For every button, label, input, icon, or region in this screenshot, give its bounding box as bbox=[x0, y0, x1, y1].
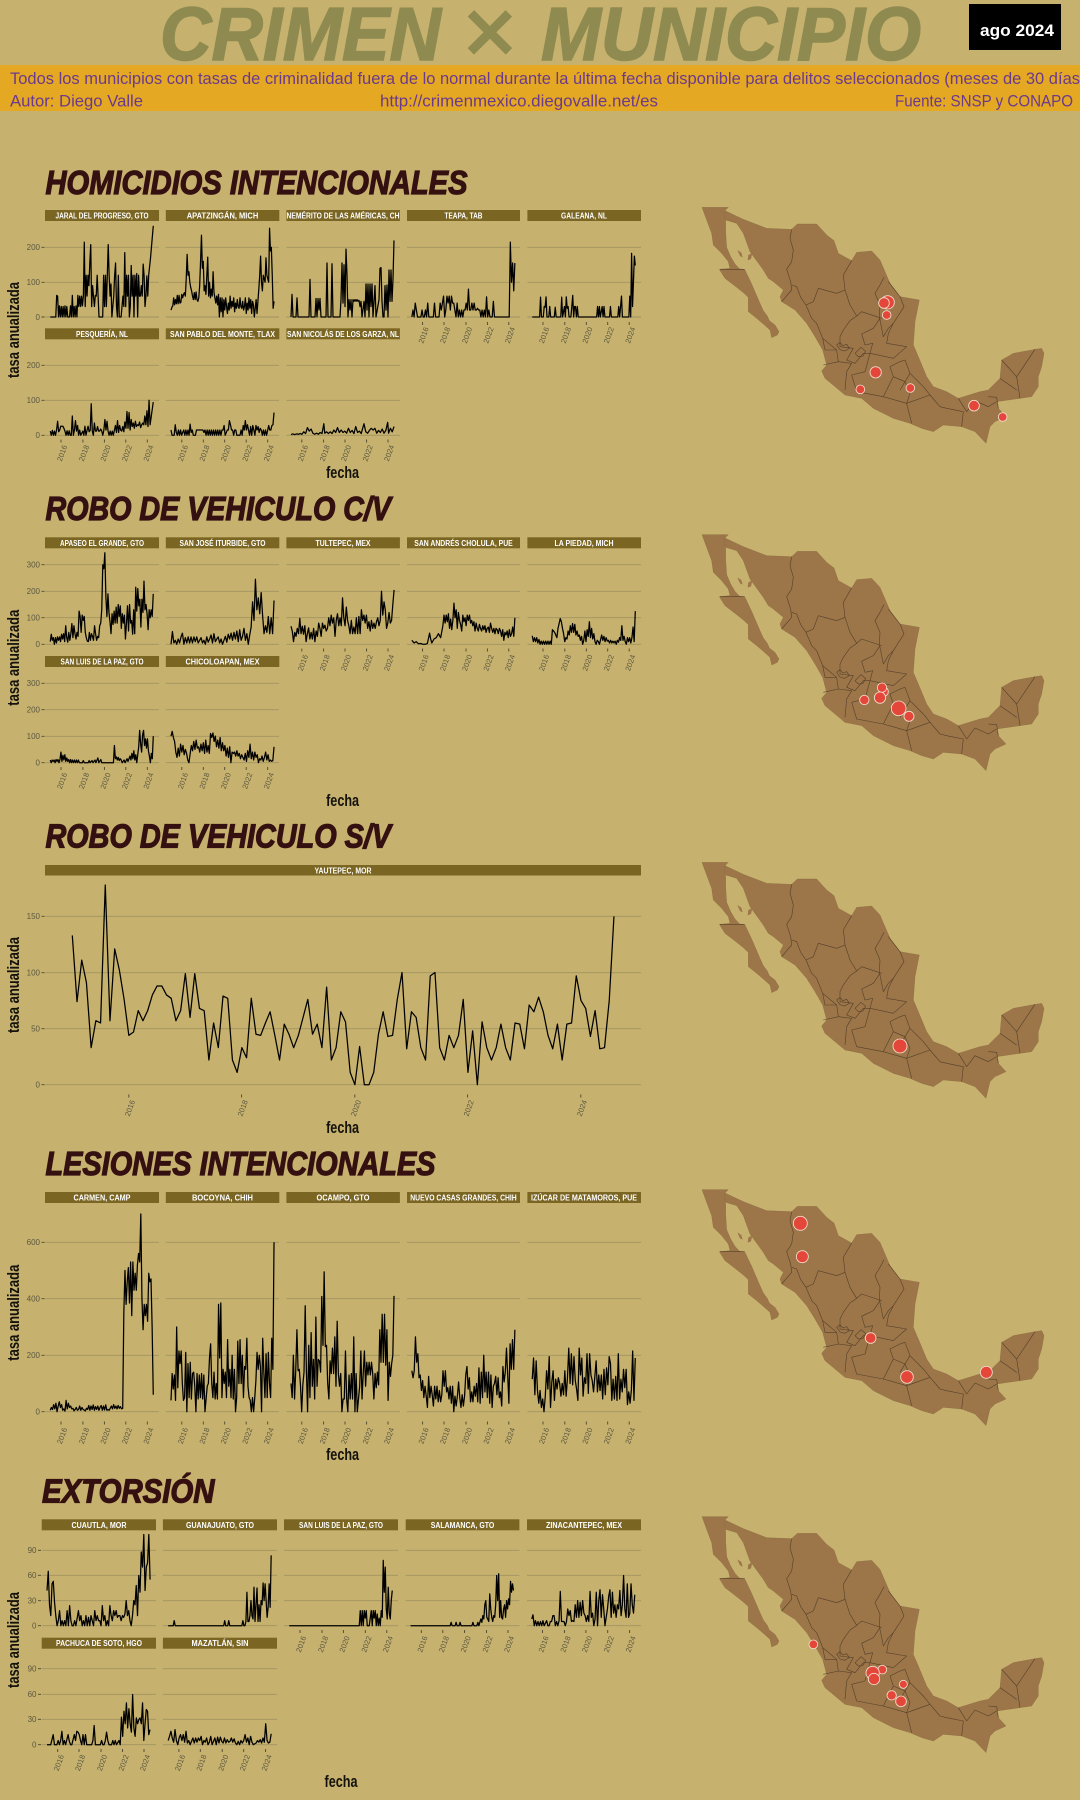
panel: Salamanca: 2018 bbox=[437, 1635, 451, 1654]
panel: Jaral del Progreso: 100 bbox=[27, 278, 41, 287]
panel: San Pablo del Monte bbox=[166, 328, 279, 463]
panel: Carmen: 2020 bbox=[98, 1426, 113, 1445]
panel: Izucar de Matamoros: 2022 bbox=[602, 1426, 616, 1445]
panel: San Nicolas de los Garza: 2022 bbox=[361, 444, 375, 463]
panel: Yautepec bbox=[27, 865, 641, 1118]
panel: Tultepec: 2022 bbox=[361, 653, 375, 672]
panel: Mazatlan: 2016 bbox=[173, 1753, 187, 1772]
section: extorsion bbox=[4, 1472, 641, 1791]
panel: Apaseo el Grande: 200 bbox=[27, 587, 41, 596]
panel: San Andres Cholula: 2024 bbox=[503, 653, 517, 672]
x axis title: fecha bbox=[324, 1772, 358, 1791]
y axis title: tasa anualizada bbox=[4, 282, 23, 378]
panel: Cuautla: CUAUTLA, MOR bbox=[72, 1520, 127, 1530]
panel: Tultepec: 2018 bbox=[318, 653, 332, 672]
panel: Tultepec: TULTEPEC, MEX bbox=[316, 538, 371, 548]
panel: Mazatlan: 2020 bbox=[216, 1753, 230, 1772]
panel: Nuevo Casas Grandes: NUEVO CASAS GRANDES, CHIH bbox=[410, 1192, 517, 1202]
panel: La Piedad: LA PIEDAD, MICH bbox=[554, 538, 614, 548]
panel: San Andres Cholula: 2020 bbox=[460, 653, 474, 672]
panel: Izucar de Matamoros: 2020 bbox=[580, 1426, 595, 1445]
panel: Carmen: CARMEN, CAMP bbox=[74, 1192, 131, 1202]
x axis title: fecha bbox=[326, 463, 359, 482]
date badge bbox=[969, 4, 1061, 50]
panel: San Nicolas de los Garza: SAN NICOLÁS DE LOS GARZA, NL bbox=[287, 329, 399, 339]
panel: San Nicolas de los Garza: 2018 bbox=[318, 444, 332, 463]
map: robo con violencia bbox=[702, 535, 1044, 771]
panel: Teapa: 2022 bbox=[481, 326, 496, 345]
panel: Tultepec: 2016 bbox=[296, 653, 310, 672]
panel: San Nicolas de los Garza: 2020 bbox=[339, 444, 353, 463]
panel: San Luis de la Paz: 2016 bbox=[294, 1635, 308, 1654]
panel: San Luis de la Paz: 0 bbox=[36, 758, 41, 768]
panel: Izucar de Matamoros bbox=[527, 1192, 641, 1445]
panel: San Luis de la Paz: 2020 bbox=[337, 1635, 352, 1654]
panel: Yautepec: 2018 bbox=[236, 1099, 250, 1118]
panel: La Piedad: 2024 bbox=[623, 653, 637, 672]
panel: Teapa: 2024 bbox=[503, 326, 517, 345]
panel: Jaral del Progreso: 0 bbox=[36, 313, 41, 322]
panel: Ocampo bbox=[286, 1192, 400, 1445]
panel: Cuautla: 90 bbox=[28, 1546, 37, 1555]
panel: Galeana: 2020 bbox=[580, 326, 595, 345]
panel: La Piedad: 2018 bbox=[559, 653, 573, 672]
panel: Izucar de Matamoros: 2018 bbox=[559, 1426, 573, 1445]
map: lesiones bbox=[702, 1190, 1044, 1426]
panel: Yautepec: 2016 bbox=[123, 1099, 137, 1118]
panel: San Luis de la Paz: 2024 bbox=[141, 771, 156, 790]
panel: San Nicolas de los Garza: 2016 bbox=[296, 444, 310, 463]
panel: Cuautla bbox=[28, 1519, 156, 1630]
panel: San Luis de la Paz bbox=[284, 1519, 398, 1654]
panel: Ocampo: 2018 bbox=[318, 1426, 332, 1445]
panel: Pachuca de Soto: 30 bbox=[28, 1715, 37, 1724]
panel: San Luis de la Paz: 2022 bbox=[359, 1635, 374, 1654]
panel: Teapa: 2016 bbox=[417, 326, 431, 345]
panel: Pachuca de Soto: 60 bbox=[28, 1690, 37, 1699]
panel: Galeana: 2018 bbox=[559, 326, 573, 345]
panel: San Luis de la Paz: SAN LUIS DE LA PAZ, GTO bbox=[60, 656, 144, 666]
panel: Apaseo el Grande: 0 bbox=[36, 640, 41, 649]
panel: Chicoloapan: 2022 bbox=[240, 771, 254, 790]
panel: Bocoyna: 2020 bbox=[219, 1426, 233, 1445]
panel: Mazatlan: 2022 bbox=[238, 1753, 252, 1772]
panel: Salamanca: 2024 bbox=[502, 1635, 516, 1654]
panel: Pesqueria: 2022 bbox=[120, 444, 134, 463]
panel: Cuautla: 0 bbox=[32, 1622, 37, 1630]
panel: Pachuca de Soto: 2020 bbox=[95, 1753, 109, 1772]
panel: Galeana: GALEANA, NL bbox=[561, 210, 607, 220]
panel: Zinacantepec: 2018 bbox=[558, 1635, 573, 1654]
map: homicidios bbox=[702, 207, 1044, 443]
panel: San Andres Cholula: 2016 bbox=[417, 653, 431, 672]
panel: Mazatlan: 2018 bbox=[194, 1753, 209, 1772]
panel: San Andres Cholula: 2018 bbox=[438, 653, 452, 672]
panel: Zinacantepec bbox=[527, 1519, 641, 1654]
x axis title: fecha bbox=[326, 791, 359, 810]
panel: Ocampo: 2016 bbox=[296, 1426, 310, 1445]
panel: Pesqueria: 2020 bbox=[98, 444, 113, 463]
panel: San Luis de la Paz: 2018 bbox=[316, 1635, 330, 1654]
panel: Yautepec: 2024 bbox=[575, 1099, 589, 1118]
panel: Bocoyna bbox=[166, 1192, 279, 1445]
panel: Zinacantepec: ZINACANTEPEC, MEX bbox=[546, 1520, 622, 1530]
panel: San Pablo del Monte: 2020 bbox=[219, 444, 233, 463]
panel: Pesqueria: 0 bbox=[36, 431, 41, 440]
panel: San Luis de la Paz: 2024 bbox=[381, 1635, 395, 1654]
panel: Guanajuato bbox=[163, 1519, 277, 1626]
x axis title: fecha bbox=[326, 1118, 359, 1137]
panel: Carmen bbox=[27, 1192, 159, 1445]
panel: Bocoyna: 2022 bbox=[240, 1426, 254, 1445]
panel: Carmen: 200 bbox=[27, 1351, 41, 1360]
panel: Pesqueria: 100 bbox=[27, 396, 41, 405]
panel: Apaseo el Grande: APASEO EL GRANDE, GTO bbox=[60, 538, 144, 548]
panel: Mazatlan: 2024 bbox=[260, 1753, 274, 1772]
author: Autor: Diego Valle bbox=[10, 92, 143, 110]
panel: San Andres Cholula: 2022 bbox=[481, 653, 496, 672]
panel: Chicoloapan: 2020 bbox=[219, 771, 233, 790]
panel: San Luis de la Paz: 200 bbox=[27, 706, 41, 714]
panel: Jaral del Progreso bbox=[27, 210, 159, 322]
heading: HOMICIDIOS INTENCIONALES bbox=[46, 164, 468, 201]
date badge: ago 2024 bbox=[980, 21, 1055, 40]
panel: Teapa: TEAPA, TAB bbox=[444, 210, 482, 220]
panel: Pachuca de Soto: 0 bbox=[32, 1740, 37, 1750]
panel: San Pablo del Monte: 2016 bbox=[176, 444, 190, 463]
heading: ROBO DE VEHICULO S/V bbox=[46, 818, 394, 854]
panel: Salamanca: 2016 bbox=[415, 1635, 430, 1654]
panel: San Pablo del Monte: 2024 bbox=[262, 444, 276, 463]
panel: La Piedad bbox=[527, 537, 641, 672]
panel: Jaral del Progreso: JARAL DEL PROGRESO, GTO bbox=[56, 210, 149, 220]
panel: Pesqueria: 200 bbox=[27, 361, 41, 370]
panel: Pachuca de Soto bbox=[28, 1638, 156, 1772]
panel: Tultepec: 2020 bbox=[339, 653, 353, 672]
panel: Pesqueria: 2024 bbox=[141, 444, 156, 463]
panel: Bocoyna: 2018 bbox=[197, 1426, 212, 1445]
subtitle: Todos los municipios con tasas de criminalidad fuera de lo normal durante la última fecha disponible para delitos seleccionados (meses de 30 días bbox=[10, 69, 1080, 88]
panel: Yautepec: 0 bbox=[36, 1080, 41, 1090]
panel: Pachuca de Soto: 2016 bbox=[52, 1753, 66, 1772]
panel: Yautepec: 2020 bbox=[349, 1099, 363, 1118]
panel: Yautepec: 100 bbox=[27, 968, 41, 978]
panel: Chicoloapan: 2024 bbox=[262, 771, 276, 790]
panel: San Nicolas de los Garza: 2024 bbox=[382, 444, 396, 463]
panel: San Luis de la Paz: 2020 bbox=[98, 771, 113, 790]
main title bbox=[160, 0, 921, 83]
panel: Chicoloapan: 2016 bbox=[176, 771, 190, 790]
panel: Pachuca de Soto: 2018 bbox=[73, 1753, 87, 1772]
panel: San Jose Iturbide bbox=[166, 537, 279, 644]
panel: Salamanca: SALAMANCA, GTO bbox=[431, 1520, 494, 1530]
panel: Bocoyna: BOCOYNA, CHIH bbox=[192, 1192, 253, 1202]
y axis title: tasa anualizada bbox=[4, 609, 23, 706]
panel: Ocampo: OCAMPO, GTO bbox=[316, 1192, 370, 1202]
panel: Galeana: 2022 bbox=[602, 326, 616, 345]
panel: Tultepec: 2024 bbox=[382, 653, 396, 672]
panel: Teapa bbox=[407, 210, 520, 345]
section: robo de vehiculo c/v bbox=[4, 490, 641, 810]
y axis title: tasa anualizada bbox=[4, 937, 23, 1033]
panel: San Luis de la Paz: 300 bbox=[27, 679, 41, 688]
panel: Chicoloapan: 2018 bbox=[197, 771, 212, 790]
panel: San Pablo del Monte: SAN PABLO DEL MONTE, TLAX bbox=[170, 329, 275, 339]
panel: Carmen: 2018 bbox=[77, 1426, 91, 1445]
panel: Apatzingan: APATZINGÁN, MICH bbox=[187, 210, 258, 220]
panel: Teapa: 2018 bbox=[438, 326, 452, 345]
panel: Galeana: 2024 bbox=[623, 326, 637, 345]
panel: Pachuca de Soto: PACHUCA DE SOTO, HGO bbox=[56, 1638, 142, 1648]
panel: Ocampo: 2020 bbox=[339, 1426, 353, 1445]
panel: San Nicolas de los Garza bbox=[286, 328, 400, 463]
panel: La Piedad: 2020 bbox=[580, 653, 595, 672]
panel: Salamanca: 2020 bbox=[459, 1635, 473, 1654]
panel: Nuevo Casas Grandes: 2022 bbox=[481, 1426, 496, 1445]
panel: Bocoyna: 2016 bbox=[176, 1426, 190, 1445]
panel: Chicoloapan: CHICOLOAPAN, MEX bbox=[186, 656, 260, 666]
y axis title: tasa anualizada bbox=[4, 1592, 23, 1688]
panel: Nuevo Casas Grandes: 2020 bbox=[460, 1426, 474, 1445]
panel: Carmen: 2024 bbox=[141, 1426, 156, 1445]
panel: Nemerito de las Americas bbox=[286, 210, 400, 317]
panel: Apatzingan bbox=[166, 210, 279, 317]
panel: Pachuca de Soto: 90 bbox=[28, 1664, 37, 1674]
panel: San Luis de la Paz: 2022 bbox=[120, 771, 134, 790]
panel: Zinacantepec: 2020 bbox=[580, 1635, 594, 1654]
panel: Yautepec: 150 bbox=[27, 912, 41, 921]
panel: Izucar de Matamoros: 2024 bbox=[623, 1426, 637, 1445]
panel: Bocoyna: 2024 bbox=[262, 1426, 276, 1445]
panel: Mazatlan: MAZATLÁN, SIN bbox=[192, 1638, 248, 1648]
heading: ROBO DE VEHICULO C/V bbox=[46, 490, 394, 527]
panel: San Luis de la Paz: 100 bbox=[27, 732, 41, 741]
section: robo de vehiculo s/v bbox=[4, 818, 641, 1137]
panel: Carmen: 2016 bbox=[55, 1426, 69, 1445]
panel: Jaral del Progreso: 200 bbox=[27, 243, 41, 252]
panel: Mazatlan bbox=[163, 1638, 277, 1772]
panel: Yautepec: 2022 bbox=[462, 1099, 476, 1118]
panel: Pesqueria bbox=[27, 328, 159, 463]
panel: San Luis de la Paz bbox=[27, 656, 159, 790]
panel: Apaseo el Grande bbox=[27, 537, 159, 649]
panel: San Luis de la Paz: SAN LUIS DE LA PAZ, GTO bbox=[299, 1520, 383, 1530]
panel: Chicoloapan bbox=[166, 656, 279, 790]
panel: La Piedad: 2022 bbox=[602, 653, 616, 672]
y axis title: tasa anualizada bbox=[4, 1264, 23, 1361]
panel: Pachuca de Soto: 2024 bbox=[138, 1753, 152, 1772]
panel: San Luis de la Paz: 2016 bbox=[55, 771, 69, 790]
panel: Izucar de Matamoros: IZÚCAR DE MATAMOROS, PUE bbox=[531, 1192, 637, 1202]
panel: Apaseo el Grande: 100 bbox=[27, 614, 41, 622]
x axis title: fecha bbox=[326, 1445, 359, 1464]
panel: San Jose Iturbide: SAN JOSÉ ITURBIDE, GTO bbox=[180, 538, 266, 548]
panel: Carmen: 0 bbox=[36, 1408, 41, 1416]
panel: Ocampo: 2022 bbox=[361, 1426, 375, 1445]
panel: Tultepec bbox=[286, 537, 400, 672]
map: robo sin violencia bbox=[702, 862, 1044, 1098]
panel: Yautepec: YAUTEPEC, MOR bbox=[314, 865, 372, 875]
map: extorsion bbox=[702, 1517, 1044, 1753]
url: http://crimenmexico.diegovalle.net/es bbox=[380, 92, 658, 110]
panel: Pesqueria: 2016 bbox=[55, 444, 69, 463]
panel: Carmen: 600 bbox=[27, 1238, 41, 1247]
panel: Galeana: 2016 bbox=[537, 326, 551, 345]
panel: Salamanca: 2022 bbox=[481, 1635, 495, 1654]
panel: San Pablo del Monte: 2022 bbox=[240, 444, 254, 463]
panel: Carmen: 400 bbox=[27, 1294, 41, 1304]
panel: Ocampo: 2024 bbox=[382, 1426, 396, 1445]
info band bbox=[0, 65, 1080, 111]
panel: San Luis de la Paz: 2018 bbox=[77, 771, 91, 790]
panel: Pachuca de Soto: 2022 bbox=[117, 1753, 131, 1772]
panel: Yautepec: 50 bbox=[31, 1024, 41, 1034]
panel: Guanajuato: GUANAJUATO, GTO bbox=[186, 1520, 254, 1530]
panel: Nuevo Casas Grandes: 2024 bbox=[503, 1426, 517, 1445]
section: homicidios intencionales bbox=[4, 164, 641, 482]
panel: San Andres Cholula: SAN ANDRÉS CHOLULA, PUE bbox=[414, 538, 513, 548]
panel: San Pablo del Monte: 2018 bbox=[197, 444, 212, 463]
panel: Zinacantepec: 2016 bbox=[537, 1635, 551, 1654]
panel: Nuevo Casas Grandes: 2018 bbox=[438, 1426, 452, 1445]
panel: San Andres Cholula bbox=[407, 537, 520, 672]
panel: Zinacantepec: 2024 bbox=[624, 1635, 638, 1654]
panel: Cuautla: 60 bbox=[28, 1571, 37, 1580]
panel: Cuautla: 30 bbox=[28, 1596, 37, 1606]
panel: Pesqueria: 2018 bbox=[77, 444, 91, 463]
panel: Galeana bbox=[527, 210, 641, 345]
panel: Izucar de Matamoros: 2016 bbox=[537, 1426, 551, 1445]
panel: Nuevo Casas Grandes bbox=[407, 1192, 520, 1445]
panel: Teapa: 2020 bbox=[460, 326, 474, 345]
section: lesiones intencionales bbox=[4, 1145, 641, 1464]
panel: Zinacantepec: 2022 bbox=[602, 1635, 616, 1654]
panel: Salamanca bbox=[406, 1519, 519, 1654]
panel: Nemerito de las Americas: NEMÉRITO DE LAS AMÉRICAS, CH bbox=[286, 210, 400, 220]
panel: Nuevo Casas Grandes: 2016 bbox=[417, 1426, 431, 1445]
heading: LESIONES INTENCIONALES bbox=[46, 1145, 436, 1182]
panel: La Piedad: 2016 bbox=[537, 653, 551, 672]
panel: Pesqueria: PESQUERÍA, NL bbox=[76, 329, 128, 339]
panel: Apaseo el Grande: 300 bbox=[27, 560, 41, 570]
panel: Carmen: 2022 bbox=[120, 1426, 134, 1445]
heading: EXTORSIÓN bbox=[42, 1472, 216, 1509]
